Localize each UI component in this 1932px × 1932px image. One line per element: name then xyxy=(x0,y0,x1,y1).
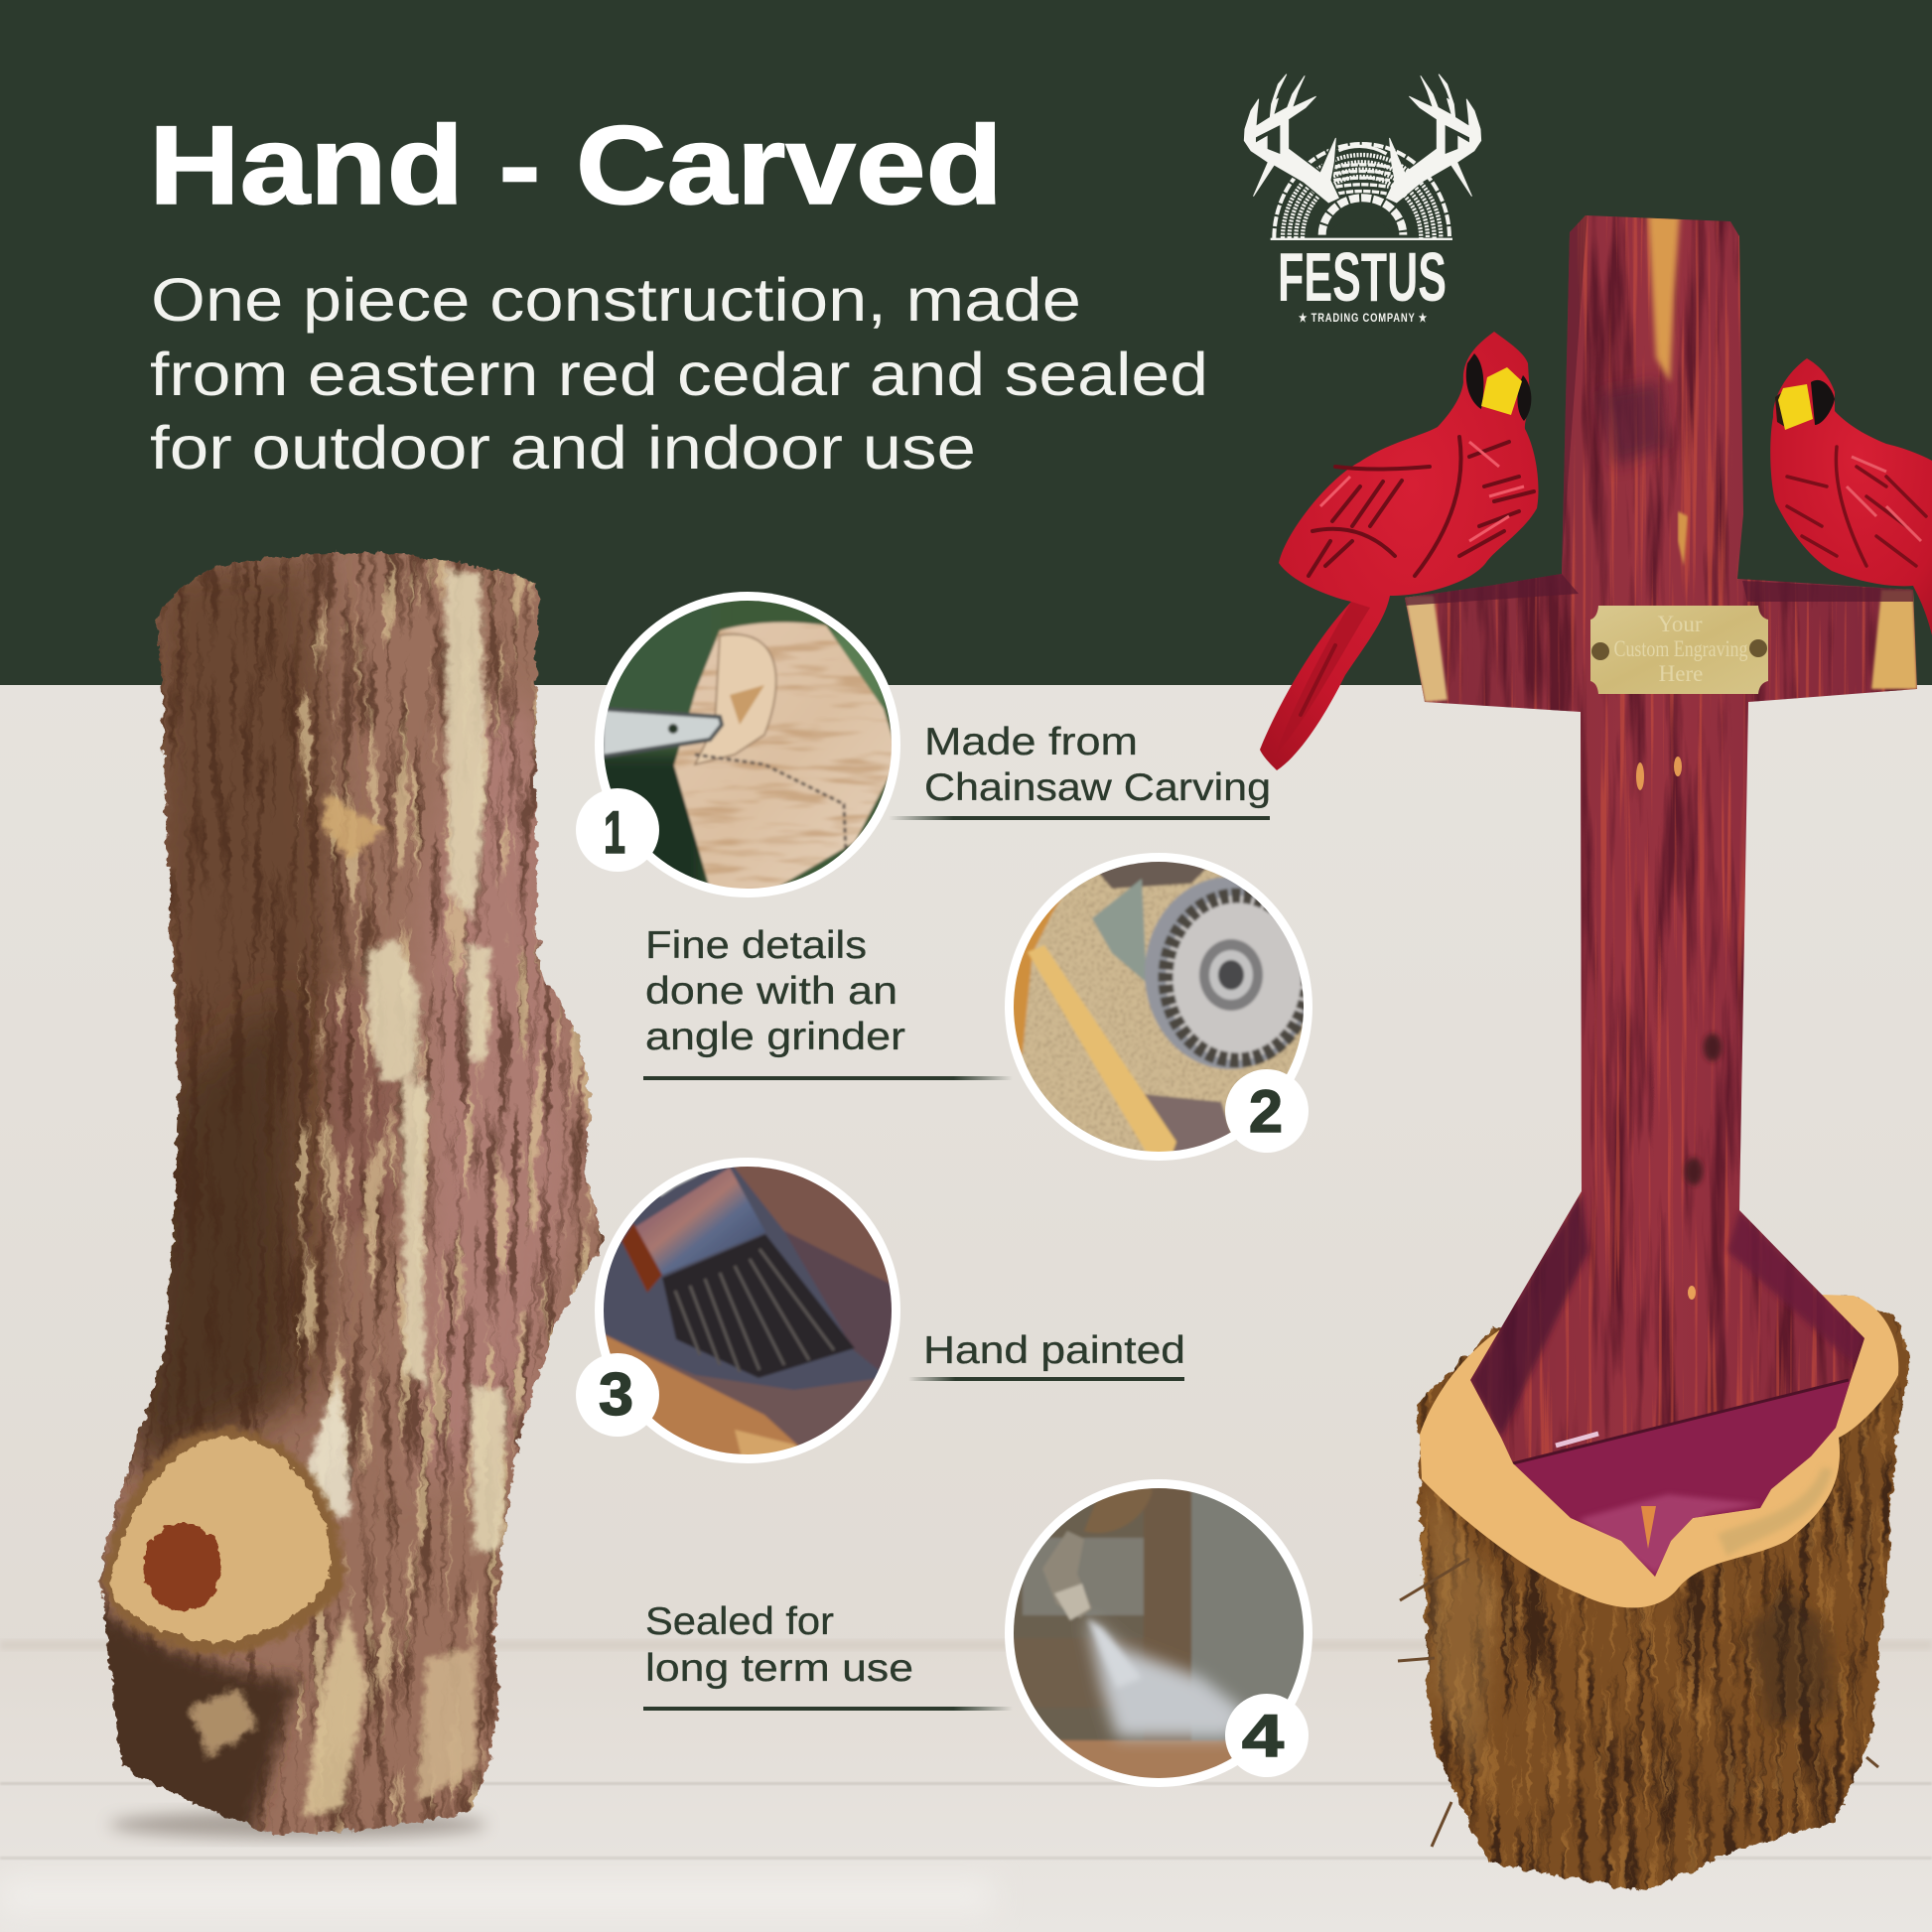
step 1 badge xyxy=(576,788,659,872)
logo artwork: antlers and tree rings xyxy=(1244,74,1481,240)
dark base under the knot xyxy=(89,1598,298,1847)
step 1: chainsaw carving xyxy=(576,586,1271,913)
step 1 label: Chainsaw Carving xyxy=(924,766,1271,809)
step 2 badge: 2 xyxy=(1249,1078,1283,1145)
step 2 photo xyxy=(1005,853,1315,1162)
step 1 label xyxy=(924,721,1271,809)
subtitle: from eastern red cedar and sealed xyxy=(150,341,1208,408)
logo wordmark: FESTUS xyxy=(1278,238,1447,316)
step 4 photo xyxy=(1005,1479,1312,1790)
step 3 label: Hand painted xyxy=(923,1329,1185,1372)
step 3: hand painted xyxy=(576,1158,1185,1469)
head and face xyxy=(1466,353,1483,409)
brass name plaque xyxy=(1590,606,1768,694)
rim shading xyxy=(1718,1467,1833,1557)
step 2 badge xyxy=(1225,1069,1309,1153)
stump bark xyxy=(1416,1295,1910,1891)
title: Hand - Carved xyxy=(149,103,1003,227)
header band xyxy=(0,0,1932,685)
step 4 label: long term use xyxy=(645,1647,913,1690)
step 4 label xyxy=(645,1600,913,1690)
brass name plaque: Custom Engraving xyxy=(1614,636,1748,661)
step 1 label: Made from xyxy=(924,721,1138,763)
raw cedar log photo illustration xyxy=(89,546,616,1847)
step 4: sealed xyxy=(643,1479,1312,1790)
step 2: angle grinder xyxy=(643,853,1315,1162)
logo tagline: ★ TRADING COMPANY ★ xyxy=(1299,311,1428,325)
tail shading xyxy=(1276,602,1370,755)
subtitle xyxy=(150,266,1208,482)
step 1 badge: 1 xyxy=(604,799,625,866)
stump bark stray fibres xyxy=(1398,1559,1878,1847)
pale exposed sapwood streaks xyxy=(303,570,506,1817)
right cardinal xyxy=(1770,358,1932,635)
step 4 badge: 4 xyxy=(1242,1703,1285,1769)
left cardinal xyxy=(1260,332,1539,770)
stump cream cut rim xyxy=(1420,1291,1898,1607)
step 4 label: Sealed for xyxy=(645,1600,834,1643)
step 2 label: done with an xyxy=(645,970,897,1013)
brass name plaque: Here xyxy=(1659,661,1703,686)
brass name plaque: Your xyxy=(1658,612,1703,636)
subtitle: for outdoor and indoor use xyxy=(150,414,976,482)
step 2 label xyxy=(645,924,905,1058)
step 2 label: angle grinder xyxy=(645,1016,905,1058)
cross side shading and sapwood xyxy=(1405,596,1448,702)
step 1 photo xyxy=(595,592,900,897)
step 3 photo xyxy=(595,1158,903,1469)
left antler xyxy=(1244,74,1338,203)
cut branch knot xyxy=(103,1428,344,1654)
step 2 label: Fine details xyxy=(645,924,867,967)
logo: Festus Trading Company xyxy=(1244,74,1481,325)
cross body xyxy=(1390,199,1926,1588)
carved cedar cross with stump xyxy=(1390,199,1926,1916)
subtitle: One piece construction, made xyxy=(151,266,1081,334)
step 4 badge xyxy=(1225,1694,1309,1777)
right antler xyxy=(1387,74,1481,203)
step 3 badge: 3 xyxy=(599,1361,633,1428)
feather carving xyxy=(1301,437,1534,715)
step 3 badge xyxy=(576,1353,659,1437)
